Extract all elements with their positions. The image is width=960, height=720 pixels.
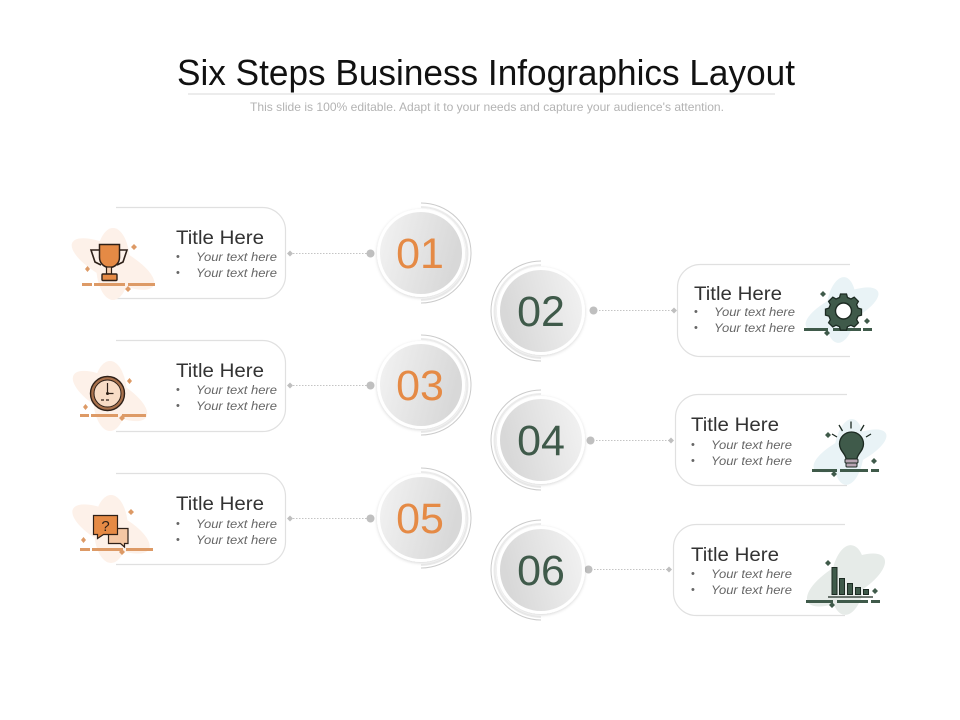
subtitle: This slide is 100% editable. Adapt it to your needs and capture your audience's attention. — [250, 100, 724, 114]
number badge 06 — [491, 520, 585, 620]
text block 05: Your text here — [196, 517, 277, 531]
number badge 01: 01 — [396, 230, 444, 278]
card outline 01 — [116, 207, 286, 299]
step 01 panel — [65, 203, 471, 303]
text block 04: Title Here — [691, 415, 779, 436]
number badge 02: 02 — [517, 288, 565, 336]
number badge 01 — [377, 203, 471, 303]
number badge 05: 05 — [396, 495, 444, 543]
icon: bar chart — [799, 543, 893, 617]
text block 04: • — [691, 439, 695, 451]
step 02 panel — [491, 261, 884, 361]
text block 04: Your text here — [711, 454, 792, 468]
text block 03: • — [176, 400, 180, 412]
icon: gear — [800, 276, 884, 344]
connector 03 — [287, 382, 374, 390]
number badge 05 — [377, 468, 471, 568]
text block 02: Your text here — [714, 305, 795, 319]
connector 04 — [586, 436, 674, 444]
card outline 06 — [673, 524, 845, 616]
connector 06 — [584, 566, 672, 574]
text block 02: Title Here — [694, 284, 782, 305]
text block 05: • — [176, 534, 180, 546]
step 06 panel — [491, 520, 893, 620]
text block 05: Your text here — [196, 533, 277, 547]
text block 06 — [691, 545, 792, 597]
icon: question speech bubbles: ? — [101, 518, 110, 535]
text block 01: Your text here — [196, 250, 277, 264]
number badge 04 — [491, 390, 585, 490]
icon: trophy — [65, 228, 161, 300]
card outline 02 — [677, 264, 850, 357]
text block 06: • — [691, 568, 695, 580]
text block 02 — [694, 284, 795, 335]
text block 06: Title Here — [691, 545, 779, 566]
text block 06: • — [691, 584, 695, 596]
number badge 03: 03 — [396, 362, 444, 410]
text block 02: • — [694, 322, 698, 334]
text block 04: Your text here — [711, 438, 792, 452]
number badge 02 — [491, 261, 585, 361]
number badge 06: 06 — [517, 547, 565, 595]
step 04 panel — [491, 390, 892, 490]
card outline 03 — [116, 340, 286, 432]
text block 01: Your text here — [196, 266, 277, 280]
text block 05: • — [176, 518, 180, 530]
connector 02 — [590, 306, 677, 314]
text block 02: • — [694, 306, 698, 318]
text block 02: Your text here — [714, 321, 795, 335]
text block 03: Your text here — [196, 383, 277, 397]
icon: question speech bubbles — [66, 495, 156, 563]
card outline 05 — [116, 473, 286, 565]
step 05 panel — [66, 468, 471, 568]
text block 06: Your text here — [711, 583, 792, 597]
number badge 04: 04 — [517, 417, 565, 465]
connector 01 — [287, 250, 374, 258]
text block 03: • — [176, 384, 180, 396]
icon: light bulb — [808, 418, 892, 486]
title: Six Steps Business Infographics Layout — [177, 52, 795, 93]
icon: clock — [66, 361, 154, 431]
text block 04: • — [691, 455, 695, 467]
number badge 03 — [377, 335, 471, 435]
step 03 panel — [66, 335, 471, 435]
text block 04 — [691, 415, 792, 468]
text block 03: Title Here — [176, 361, 264, 382]
text block 01: • — [176, 251, 180, 263]
text block 01 — [176, 228, 277, 280]
text block 01: Title Here — [176, 228, 264, 249]
text block 06: Your text here — [711, 567, 792, 581]
connector 05 — [287, 514, 374, 522]
card outline 04 — [675, 394, 847, 486]
text block 05 — [176, 494, 277, 547]
text block 05: Title Here — [176, 494, 264, 515]
text block 01: • — [176, 267, 180, 279]
text block 03 — [176, 361, 277, 413]
text block 03: Your text here — [196, 399, 277, 413]
